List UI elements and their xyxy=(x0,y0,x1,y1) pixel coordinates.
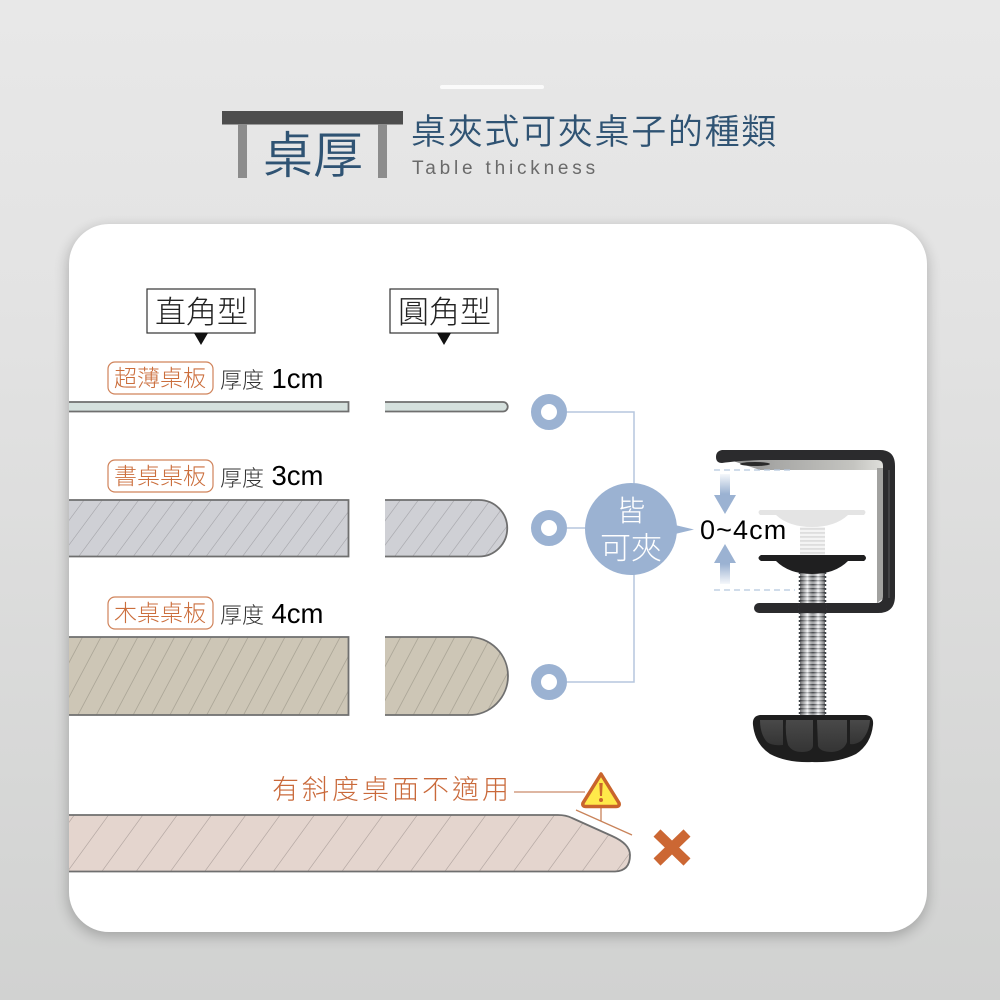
table: wood right-angle xyxy=(69,637,348,715)
heading: table icon with 桌厚 xyxy=(222,111,403,188)
ring marker: middle xyxy=(536,515,562,541)
pressure plate xyxy=(758,555,866,574)
clamp bracket xyxy=(716,450,895,613)
ghost screw position xyxy=(758,510,866,556)
clamp photo illustration xyxy=(716,450,895,762)
icon: cross xyxy=(657,833,687,862)
table: slanted top xyxy=(69,815,630,872)
tag: ultra-thin tabletop 1cm xyxy=(108,359,323,395)
warning leader line xyxy=(514,791,585,793)
badge: all can clamp: 可夾 xyxy=(600,523,662,568)
label: rounded type xyxy=(390,287,498,345)
lower arm over screw xyxy=(799,603,826,613)
tag: wood tabletop 4cm xyxy=(108,594,323,630)
arrow: down xyxy=(714,474,736,514)
ring marker: top xyxy=(536,399,562,425)
arrow: up xyxy=(714,544,736,584)
title: 桌夾式可夾桌子的種類 xyxy=(411,104,778,155)
threaded screw xyxy=(800,572,826,716)
tag: wood tabletop 4cm: 厚度 xyxy=(220,598,264,630)
badge: all can clamp xyxy=(585,483,694,575)
warning text: 有斜度桌面不適用 xyxy=(272,768,512,807)
label: rounded type: 圓角型 xyxy=(398,287,491,332)
tag: wood tabletop 4cm: 4cm xyxy=(272,598,323,629)
tag: desk tabletop 3cm xyxy=(108,457,323,493)
heading: table icon with 桌厚: 桌厚 xyxy=(263,116,363,188)
table: desk right-angle xyxy=(69,500,348,556)
label: 0~4cm: 0~4cm xyxy=(700,515,787,545)
subtitle: Table thickness xyxy=(412,158,599,179)
tag: desk tabletop 3cm: 書桌桌板 xyxy=(114,457,206,491)
badge: all can clamp: 皆 xyxy=(616,488,646,530)
gauge: dashed limits xyxy=(714,470,795,590)
panel: main card xyxy=(68,224,927,936)
tag: desk tabletop 3cm: 3cm xyxy=(272,460,323,491)
tag: ultra-thin tabletop 1cm: 1cm xyxy=(272,363,323,394)
label: right-angle type xyxy=(147,287,255,345)
slope marker lines xyxy=(576,806,632,835)
tag: desk tabletop 3cm: 厚度 xyxy=(220,461,264,493)
table: ultra-thin rounded xyxy=(385,402,508,412)
tag: ultra-thin tabletop 1cm: 超薄桌板 xyxy=(114,359,206,393)
label: right-angle type: 直角型 xyxy=(155,287,248,332)
ring marker: bottom xyxy=(536,669,562,695)
knob xyxy=(753,715,873,762)
table: ultra-thin right-angle xyxy=(69,402,348,412)
tag: wood tabletop 4cm: 木桌桌板 xyxy=(114,594,206,628)
table: desk rounded xyxy=(385,500,507,556)
table: wood rounded xyxy=(385,637,508,715)
connector lines xyxy=(567,412,634,682)
tag: ultra-thin tabletop 1cm: 厚度 xyxy=(220,363,264,395)
icon: warning triangle xyxy=(583,774,619,806)
